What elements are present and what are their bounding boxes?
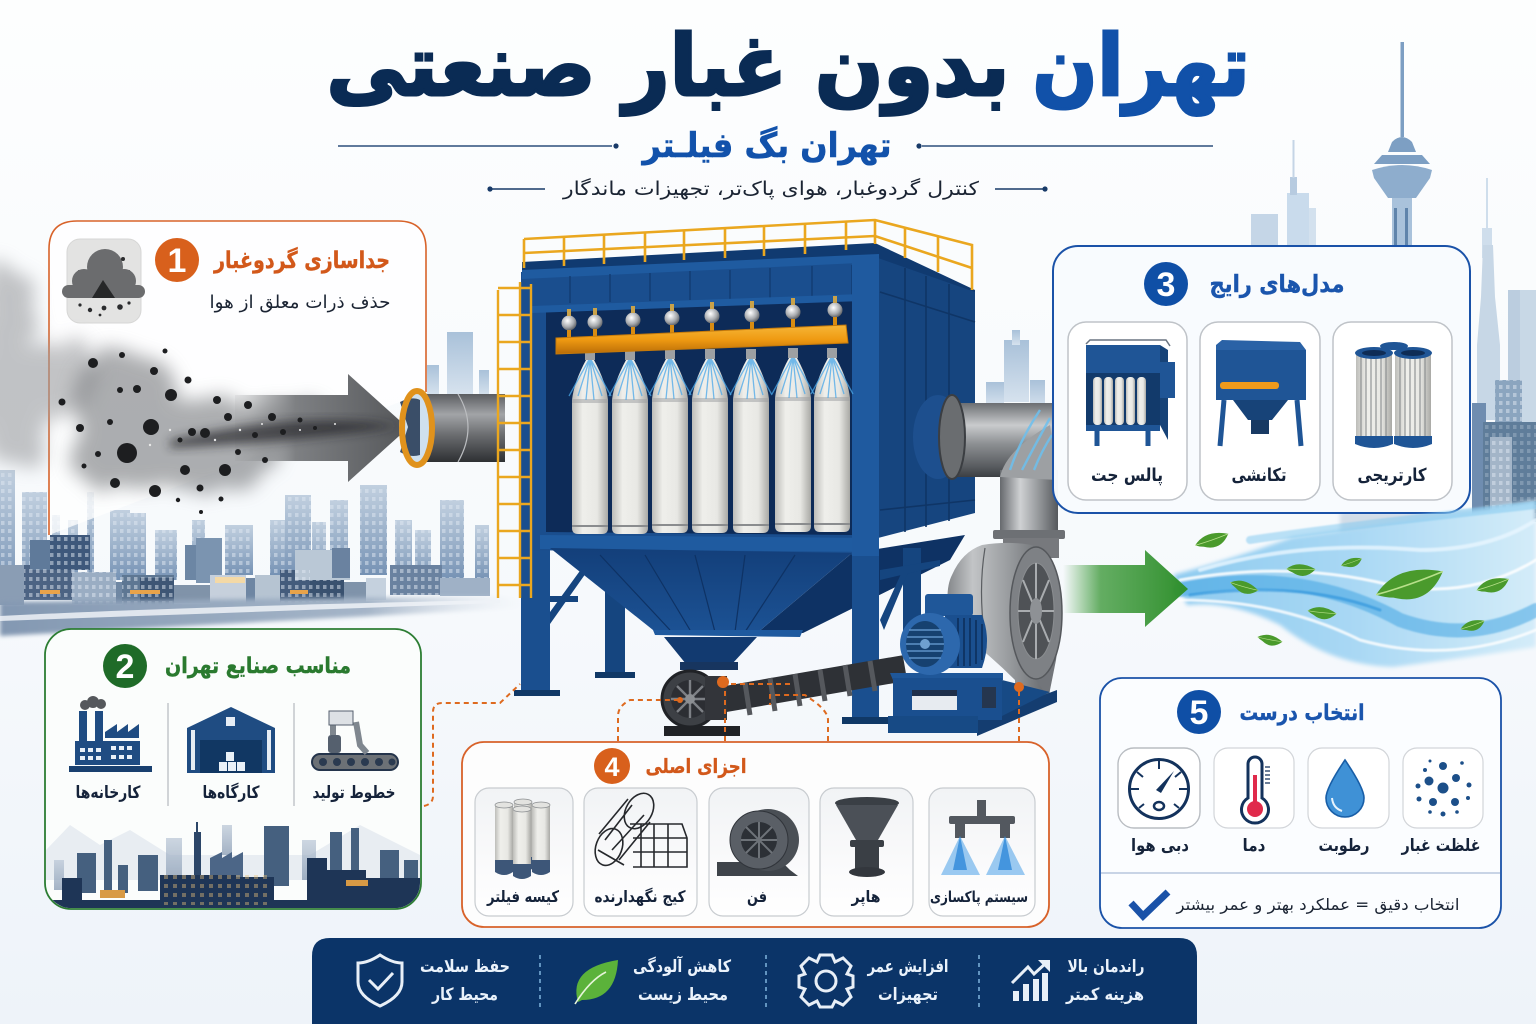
outlet duct [913, 395, 1065, 539]
footer benefits band [312, 938, 1197, 1024]
text: equipment life: افزایش عمر [867, 957, 948, 977]
panel 3: common models [1053, 246, 1470, 513]
filter bags with sprays [569, 348, 853, 534]
icon: dust cloud tile [62, 239, 145, 323]
right side wall [878, 258, 975, 538]
front frame [521, 254, 879, 556]
label: دما [1242, 836, 1266, 856]
card: air flow gauge [1118, 748, 1200, 828]
card: support cage [584, 788, 697, 916]
number badge 3 [1144, 262, 1188, 306]
subtitle: Tehran Bag Filter: تهران بگ فیلـتر [641, 126, 892, 166]
label: کارخانه‌ها [76, 783, 141, 803]
panel 4: main components [462, 742, 1049, 927]
rotary valve [662, 671, 740, 736]
city strip [46, 822, 421, 910]
heading: right choice: انتخاب درست [1240, 701, 1364, 726]
subtitle line right [922, 145, 1213, 147]
icon: factory [69, 696, 152, 772]
tagline divider [487, 143, 1048, 192]
label: کیسه فیلتر [486, 887, 560, 906]
icon: gear [799, 955, 853, 1007]
card: pulse jet [1068, 322, 1187, 500]
card: cleaning system [929, 788, 1035, 916]
heading: common models: مدل‌های رایج [1210, 270, 1344, 298]
label: کیج نگهدارنده [594, 887, 686, 906]
subtitle line left [338, 145, 612, 147]
card: humidity [1308, 748, 1389, 828]
arrow: incoming dirty air [235, 374, 408, 482]
label: رطوبت [1318, 836, 1370, 856]
number badge 4 [594, 748, 630, 784]
title: without industrial dust: بدون غبار صنعتی [326, 17, 1010, 116]
leaves [1195, 533, 1509, 650]
number badge 5: 5 [1190, 694, 1208, 732]
number badge 5 [1177, 690, 1221, 734]
card: fan [709, 788, 809, 916]
roof [522, 243, 975, 296]
text: reduce pollution: کاهش آلودگی [633, 955, 731, 977]
electric motor and base [888, 594, 1057, 736]
label: دبی هوا [1131, 836, 1189, 856]
back and front support legs [514, 545, 940, 724]
number badge 1 [155, 238, 199, 282]
tagline: کنترل گردوغبار، هوای پاک‌تر، تجهیزات ماندگار [562, 177, 980, 200]
filter chamber interior [546, 300, 852, 535]
number badge 1: 1 [168, 242, 186, 280]
number badge 4: 4 [604, 752, 620, 782]
inlet pipe [399, 391, 505, 465]
icon: shield [358, 955, 402, 1006]
left city skyline [0, 470, 525, 636]
card: hopper [820, 788, 913, 916]
note: accurate selection: انتخاب دقیق = عملکرد بهتر و عمر بیشتر [1175, 895, 1460, 915]
text: equipment: تجهیزات [878, 985, 938, 1005]
number badge 2: 2 [116, 648, 134, 686]
icon: rising chart [1012, 960, 1050, 1001]
icon: Milad tower [1372, 42, 1432, 248]
label: کارگاه‌ها [202, 782, 260, 803]
label: هاپر [851, 887, 880, 907]
card: filter bag [475, 788, 573, 916]
text: workplace health 2: محیط کار [431, 985, 498, 1005]
label: غلظت غبار [1401, 836, 1480, 856]
orange header pipe and valves [556, 296, 848, 354]
icon: workshop [187, 707, 275, 773]
centrifugal fan [947, 538, 1062, 697]
panel 1: dust separation [49, 221, 426, 535]
yellow ladder [498, 282, 531, 598]
number badge 3: 3 [1157, 266, 1175, 304]
icon: check mark [1131, 892, 1168, 916]
clean air water flow [1063, 500, 1536, 667]
label: خطوط تولید [312, 783, 396, 803]
center faint skyline [427, 330, 1045, 408]
label: کارتریجی [1358, 465, 1427, 486]
hopper back side [757, 535, 965, 633]
card: shaker [1200, 322, 1320, 500]
screw conveyor [720, 661, 905, 715]
number badge 2 [103, 644, 147, 688]
hopper [550, 548, 852, 670]
label: پالس جت [1091, 465, 1163, 486]
arrow: clean air out [1063, 550, 1188, 627]
heading: suitable for Tehran industries: مناسب صنایع تهران [165, 654, 351, 679]
label: تکانشی [1232, 465, 1286, 486]
dirty air smoke and arrow [0, 262, 408, 514]
text: environment: محیط زیست [638, 985, 728, 1005]
right city skyline with Milad tower [1251, 42, 1536, 558]
card: cartridge [1333, 322, 1452, 500]
icon: production line robot [312, 711, 398, 770]
label: فن [747, 887, 767, 906]
label: سیستم پاکسازی [930, 888, 1028, 907]
heading: dust separation: جداسازی گردوغبار [213, 247, 390, 274]
yellow roof railing [524, 220, 972, 290]
heading: main parts: اجزای اصلی [646, 754, 746, 778]
text: lower cost: هزینه کمتر [1065, 985, 1144, 1005]
panel 5: right selection [1100, 678, 1501, 928]
card: temperature [1214, 748, 1294, 828]
panel 2: suitable for Tehran industries [45, 629, 421, 910]
leader lines to panels [424, 676, 1024, 806]
card: dust concentration [1403, 748, 1483, 828]
icon: leaf [575, 960, 618, 1004]
text: workplace health: حفظ سلامت [420, 957, 510, 977]
title: Tehran in blue: تهران [1032, 17, 1250, 116]
subtext: remove suspended particles: حذف ذرات معلق از هوا [210, 292, 390, 313]
bag filter machine [399, 220, 1065, 736]
text: high efficiency: راندمان بالا [1068, 957, 1144, 977]
